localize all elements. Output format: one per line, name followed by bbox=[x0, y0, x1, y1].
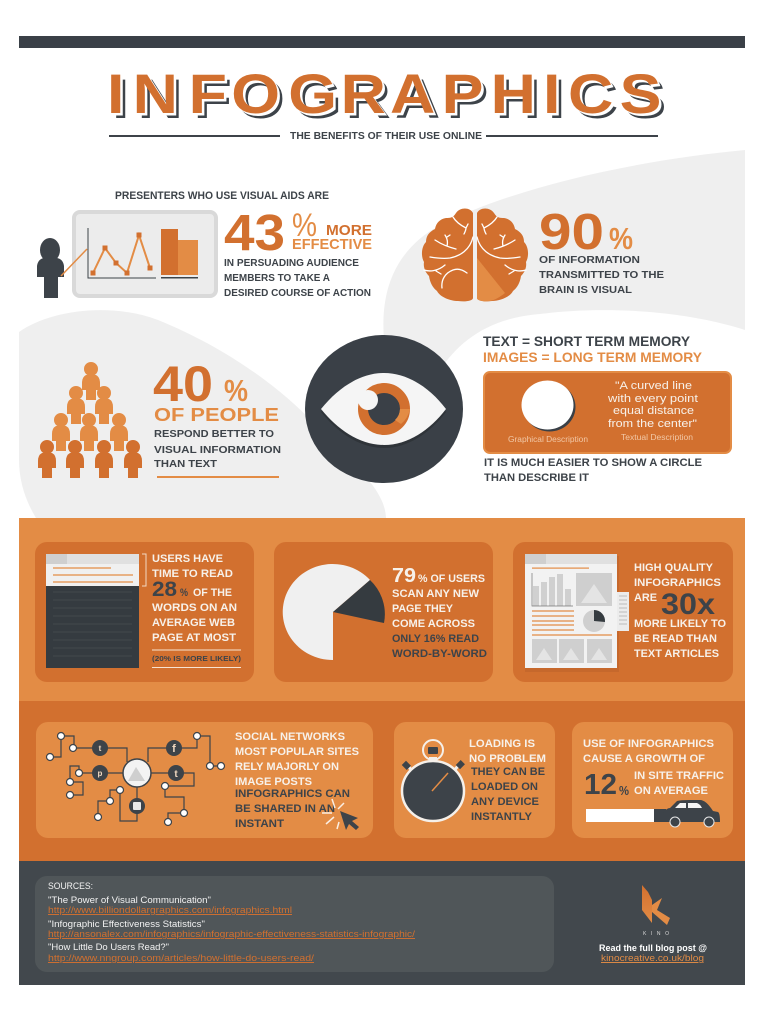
stat: 40% of people: % bbox=[224, 373, 248, 408]
text: high quality infographics: ARE bbox=[634, 592, 657, 604]
text: users scan: COME ACROSS bbox=[392, 618, 475, 630]
text: respond better: THAN TEXT bbox=[154, 458, 218, 470]
panel: sources: http://www.nngroup.com/articles/how-little-do-users-read/ bbox=[48, 953, 314, 964]
text: social networks: MOST POPULAR SITES bbox=[235, 746, 359, 758]
text: users have time to read: (20% IS MORE LIKELY) bbox=[152, 654, 242, 663]
text: information transmitted bbox=[539, 254, 664, 296]
panel: site traffic bbox=[572, 722, 733, 838]
section: light orange band bbox=[19, 518, 745, 701]
text: users have time to read: % bbox=[180, 587, 188, 599]
callout: circle description: with every point bbox=[607, 393, 698, 405]
stat: 90%: 90 bbox=[539, 203, 604, 260]
background blob: left bbox=[19, 310, 386, 518]
callout: circle description bbox=[484, 372, 731, 453]
logo: kino: KINO bbox=[643, 931, 669, 937]
panel: 30x more likely bbox=[513, 542, 733, 682]
text: users have time to read: AVERAGE WEB bbox=[152, 617, 235, 629]
stat: 43% more effective: MORE bbox=[326, 222, 372, 239]
diagram: social network: f bbox=[172, 743, 176, 755]
text: persuading audience: DESIRED COURSE OF ACTION bbox=[224, 287, 371, 299]
text: information transmitted: TRANSMITTED TO THE bbox=[539, 269, 664, 281]
callout: circle description: equal distance bbox=[613, 405, 694, 417]
text: high quality infographics: MORE LIKELY TO bbox=[634, 618, 726, 630]
text: growth 12%: % bbox=[619, 783, 629, 798]
stat: 43% more effective bbox=[224, 204, 372, 261]
subtitle: THE BENEFITS OF THEIR USE ONLINE bbox=[290, 131, 482, 142]
text: high quality infographics: BE READ THAN bbox=[634, 633, 717, 645]
text: persuading audience bbox=[224, 257, 371, 299]
text: growth 12%: ON AVERAGE bbox=[634, 785, 708, 797]
text: loading: ANY DEVICE bbox=[471, 796, 539, 808]
panel: sources: "Infographic Effectiveness Statistics" bbox=[48, 919, 205, 930]
diagram: social network: p bbox=[98, 769, 103, 778]
text: users have time to read bbox=[152, 553, 242, 668]
text: respond better: RESPOND BETTER TO bbox=[154, 428, 274, 440]
callout: circle description: Graphical Description bbox=[508, 435, 588, 444]
panel: sources bbox=[35, 876, 554, 972]
panel: 40% of people bbox=[38, 356, 281, 478]
text: users have time to read: OF THE bbox=[193, 587, 232, 599]
heading: text vs images memory: TEXT = SHORT TERM MEMORY bbox=[483, 333, 691, 349]
icon: stopwatch bbox=[402, 740, 465, 821]
text: persuading audience: IN PERSUADING AUDIENCE bbox=[224, 257, 359, 269]
text: read the blog post: Read the full blog post @ bbox=[599, 943, 707, 954]
text: read the blog post bbox=[599, 943, 707, 964]
title: INFOGRAPHICS bbox=[107, 62, 662, 125]
diagram: social network bbox=[46, 732, 224, 826]
heading: presenters: PRESENTERS WHO USE VISUAL AIDS ARE bbox=[115, 190, 329, 202]
text: users have time to read: PAGE AT MOST bbox=[152, 632, 236, 644]
stat: 40% of people: 40 bbox=[153, 356, 213, 412]
icon: infographic page bbox=[525, 554, 629, 672]
panel: brain 90% bbox=[422, 203, 664, 301]
text: growth 12%: 12 bbox=[584, 769, 617, 801]
panel: sources: "How Little Do Users Read?" bbox=[48, 942, 169, 953]
panel: sources: "The Power of Visual Communication" bbox=[48, 895, 211, 906]
text: growth 12%: IN SITE TRAFFIC bbox=[634, 770, 724, 782]
stat: 43% more effective: 43 bbox=[224, 204, 285, 261]
stat: 90%: % bbox=[609, 221, 633, 256]
text: social networks: SOCIAL NETWORKS bbox=[235, 731, 345, 743]
title: INFOGRAPHICS bbox=[112, 67, 667, 130]
section: footer band bbox=[19, 861, 745, 985]
text: growth 12%: USE OF INFOGRAPHICS bbox=[583, 738, 714, 750]
title: INFOGRAPHICS bbox=[109, 65, 664, 128]
text: users have time to read: WORDS ON AN bbox=[152, 602, 237, 614]
logo: kino bbox=[642, 885, 670, 937]
stat: 43% more effective: EFFECTIVE bbox=[292, 236, 372, 253]
text: users scan: PAGE THEY bbox=[392, 603, 454, 615]
stat: 90% bbox=[539, 203, 633, 260]
callout: circle description: Textual Description bbox=[621, 433, 693, 442]
text: respond better bbox=[154, 428, 281, 470]
icon: eye bbox=[305, 335, 463, 483]
icon: cursor bbox=[322, 799, 359, 830]
text: high quality infographics bbox=[634, 562, 726, 660]
stat: 43% more effective: % bbox=[292, 207, 317, 243]
panel: sources: http://www.billiondollargraphics.com/infographics.html bbox=[48, 905, 292, 916]
top bar bbox=[19, 36, 745, 48]
text: social networks: RELY MAJORLY ON bbox=[235, 761, 339, 773]
icon: car with trail bbox=[586, 800, 720, 827]
panel: memory bbox=[483, 333, 731, 484]
text: respond better: VISUAL INFORMATION bbox=[154, 444, 281, 456]
panel: 28% of words bbox=[35, 542, 254, 682]
text: easier to show: IT IS MUCH EASIER TO SHOW A CIRCLE bbox=[484, 457, 702, 469]
text: loading: NO PROBLEM bbox=[469, 753, 546, 765]
panel: presenters 43% bbox=[37, 190, 372, 299]
diagram: social network: t bbox=[99, 744, 102, 753]
text: easier to show: THAN DESCRIBE IT bbox=[484, 472, 589, 484]
background blob: upper right bbox=[383, 150, 745, 370]
text: high quality infographics: TEXT ARTICLES bbox=[634, 648, 719, 660]
chart: pie bbox=[283, 564, 385, 660]
text: social networks: INSTANT bbox=[235, 818, 284, 830]
text: users scan: ONLY 16% READ bbox=[392, 633, 479, 645]
callout: circle description: "A curved line bbox=[615, 380, 692, 392]
text: social networks: IMAGE POSTS bbox=[235, 776, 312, 788]
panel: loading bbox=[394, 722, 555, 838]
panel: 79% scan bbox=[274, 542, 493, 682]
panel: sources: SOURCES: bbox=[48, 881, 93, 892]
text: loading: INSTANTLY bbox=[471, 811, 533, 823]
text: information transmitted: BRAIN IS VISUAL bbox=[539, 284, 633, 296]
stat: 40% of people bbox=[153, 356, 279, 425]
text: users have time to read: TIME TO READ bbox=[152, 568, 233, 580]
text: users have time to read: 28 bbox=[152, 578, 177, 601]
stat: 40% of people: OF PEOPLE bbox=[154, 405, 279, 425]
callout: circle description: from the center" bbox=[608, 418, 697, 430]
text: high quality infographics: 30x bbox=[661, 588, 715, 621]
text: information transmitted: OF INFORMATION bbox=[539, 254, 640, 266]
text: growth 12%: CAUSE A GROWTH OF bbox=[583, 753, 705, 765]
text: users scan: WORD-BY-WORD bbox=[392, 648, 487, 660]
text: high quality infographics: HIGH QUALITY bbox=[634, 562, 714, 574]
heading: text vs images memory: IMAGES = LONG TERM MEMORY bbox=[483, 349, 703, 365]
text: persuading audience: MEMBERS TO TAKE A bbox=[224, 272, 330, 284]
panel: social networks bbox=[36, 722, 373, 838]
text: loading: LOADED ON bbox=[471, 781, 538, 793]
text: users scan bbox=[392, 565, 487, 660]
text: social networks bbox=[235, 731, 359, 830]
text: read the blog post: kinocreative.co.uk/blog bbox=[601, 953, 704, 964]
text: loading: THEY CAN BE bbox=[471, 766, 545, 778]
text: social networks: BE SHARED IN AN bbox=[235, 803, 335, 815]
section: dark orange band bbox=[19, 701, 745, 861]
icon: brain bbox=[422, 208, 528, 301]
text: social networks: INFOGRAPHICS CAN bbox=[235, 788, 350, 800]
icon: presenter bbox=[37, 238, 87, 298]
text: users scan: SCAN ANY NEW bbox=[392, 588, 480, 600]
diagram: social network: t bbox=[174, 769, 178, 780]
text: high quality infographics: INFOGRAPHICS bbox=[634, 577, 721, 589]
panel: sources: http://ansonalex.com/infographics/infographic-effectiveness-statistics-infographic/ bbox=[48, 929, 415, 940]
text: loading: LOADING IS bbox=[469, 738, 535, 750]
heading: text vs images memory bbox=[483, 333, 703, 365]
icon: presentation board bbox=[74, 212, 216, 296]
text: loading bbox=[469, 738, 546, 823]
text: users scan: 79 bbox=[392, 565, 416, 587]
icon: people pyramid bbox=[38, 362, 142, 478]
text: easier to show bbox=[484, 457, 702, 484]
text: growth 12% bbox=[583, 738, 724, 801]
text: users have time to read: USERS HAVE bbox=[152, 553, 223, 565]
text: users scan: % OF USERS bbox=[418, 573, 485, 585]
icon: web page bbox=[46, 554, 146, 668]
